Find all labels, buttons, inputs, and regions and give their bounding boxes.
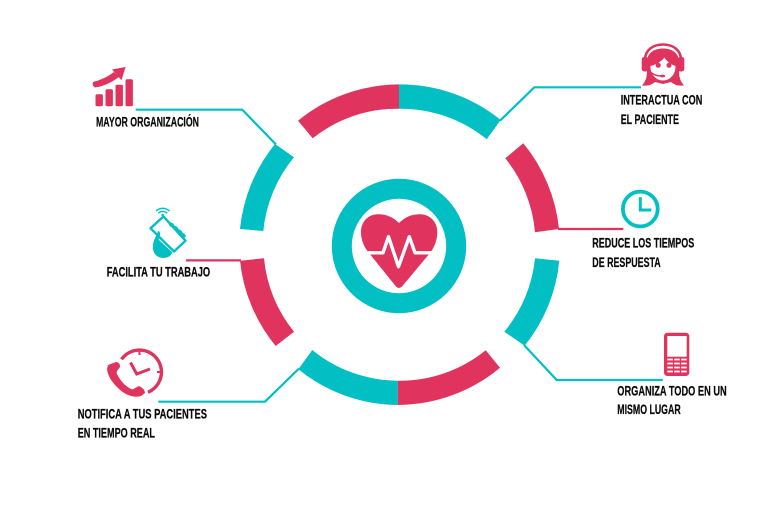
text: interactua line 2: EL PACIENTE [621, 112, 679, 128]
icon: growth chart [93, 67, 133, 106]
handset [107, 362, 145, 397]
ring segment: left lower [240, 258, 294, 346]
central heart emblem [342, 189, 456, 303]
ear cups [642, 57, 648, 72]
connector lines [136, 87, 663, 402]
phone outline [150, 216, 186, 252]
icon: pulse line [358, 237, 441, 267]
text: reduce line 2: DE RESPUESTA [592, 255, 661, 271]
ring segment: top left [298, 84, 399, 138]
ring segment: right upper [505, 143, 559, 232]
text: facilita tu trabajo: FACILITA TU TRABAJO [107, 265, 210, 281]
eyes [656, 63, 661, 68]
text: reduce line 1: REDUCE LOS TIEMPOS [592, 236, 694, 252]
text: interactua line 1: INTERACTUA CON [621, 92, 702, 108]
hair [642, 48, 684, 86]
text: notifica line 2: EN TIEMPO REAL [78, 425, 155, 441]
icon: mobile phone [664, 333, 689, 376]
icon: heart [361, 214, 437, 288]
text: notifica line 1: NOTIFICA A TUS PACIENTES [78, 406, 207, 422]
ring segment: top right [399, 84, 501, 139]
microphone [650, 71, 661, 76]
connector: notifica [158, 368, 299, 402]
text: organiza line 2: MISMO LUGAR [617, 402, 681, 418]
ring segment: left upper [240, 144, 294, 231]
clock ring [122, 350, 161, 392]
icon: hand holding phone [150, 208, 187, 258]
ring segment: bottom right [398, 350, 500, 405]
outer segmented ring [240, 84, 559, 405]
teal circle [342, 189, 456, 303]
face [650, 58, 676, 80]
text: mayor organización: MAYOR ORGANIZACIÓN [96, 113, 199, 131]
connector: interactua [500, 87, 641, 121]
wifi signal [156, 208, 170, 213]
clock hands [130, 362, 150, 374]
clock ticks [140, 350, 161, 372]
connector: mayor organización [136, 110, 276, 144]
icon: clock [623, 192, 658, 226]
connector: facilita [186, 259, 241, 261]
connector: organiza [524, 345, 663, 380]
ring segment: bottom left [298, 350, 398, 405]
icon: phone and clock [107, 350, 161, 397]
ring segment: right lower [504, 258, 559, 346]
icon: operator with headset [642, 44, 684, 86]
connector: reduce tiempos [558, 228, 623, 230]
hand [153, 230, 172, 258]
headband [645, 44, 681, 60]
fingers [168, 221, 187, 239]
